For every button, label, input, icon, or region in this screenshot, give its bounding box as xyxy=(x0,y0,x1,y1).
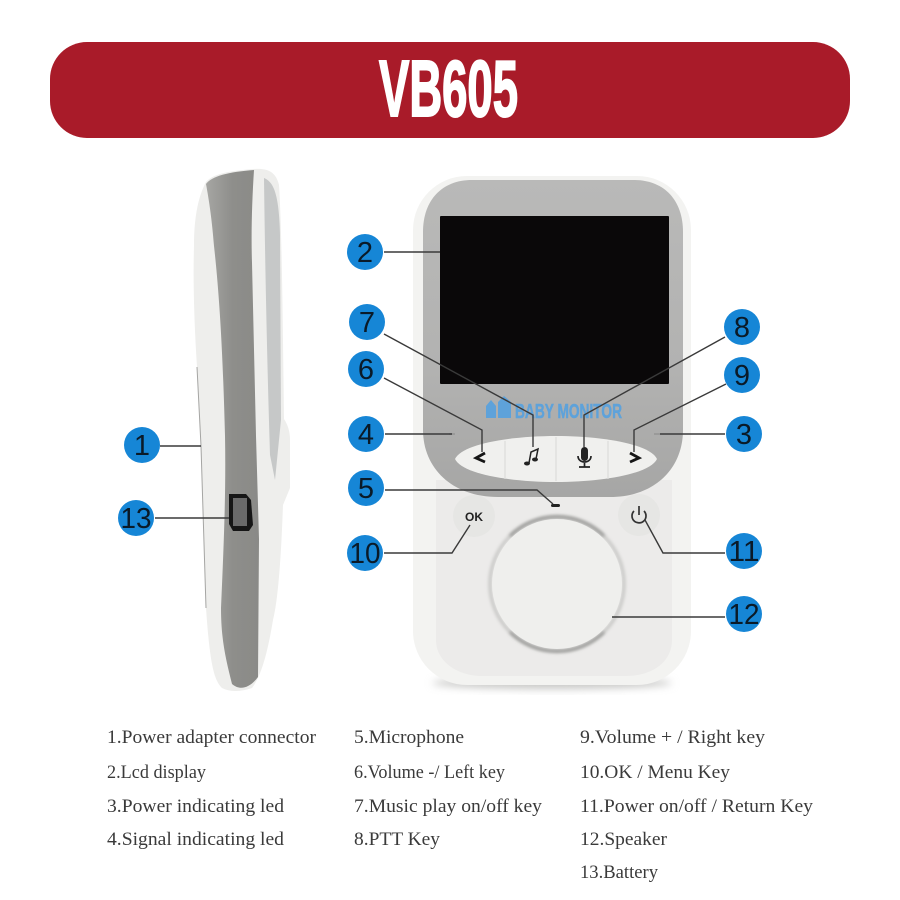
callout 6: 6 xyxy=(358,354,374,386)
screen xyxy=(440,216,669,384)
legend column 1: 4.Signal indicating led xyxy=(107,830,285,850)
callout 8: 8 xyxy=(734,312,750,344)
legend column 1 xyxy=(107,728,316,850)
callout 2: 2 xyxy=(357,237,373,269)
icon: microphone xyxy=(578,447,591,467)
callout 11: 11 xyxy=(728,536,760,568)
callout 7: 7 xyxy=(359,307,375,339)
indicator leds xyxy=(449,433,660,435)
callout 4 xyxy=(348,416,384,452)
callout 5 xyxy=(348,470,384,506)
front view of monitor xyxy=(413,176,691,689)
legend column 2: 5.Microphone xyxy=(354,728,464,748)
callout 10: 10 xyxy=(350,538,380,570)
legend column 1: 1.Power adapter connector xyxy=(107,728,316,748)
leader lines xyxy=(155,252,726,617)
device shadow xyxy=(432,677,672,689)
gray face panel xyxy=(423,180,683,497)
title banner xyxy=(50,42,850,138)
callout 8 xyxy=(724,309,760,345)
callout 12: 12 xyxy=(728,599,760,631)
legend column 3: 12.Speaker xyxy=(580,830,667,850)
legend column 2: 8.PTT Key xyxy=(354,830,441,850)
callout 7 xyxy=(349,304,385,340)
legend column 3 xyxy=(580,728,814,883)
OK button: OK xyxy=(465,510,483,524)
callout 3 xyxy=(726,416,762,452)
callout 1 xyxy=(124,427,160,463)
callout 9 xyxy=(724,357,760,393)
side screen bezel xyxy=(264,178,281,480)
callout 3: 3 xyxy=(736,419,752,451)
legend column 2: 6.Volume -/ Left key xyxy=(354,763,506,783)
icon: USB port xyxy=(229,494,253,531)
legend column 2: 7.Music play on/off key xyxy=(354,797,543,817)
callout 6 xyxy=(348,351,384,387)
icon: right arrow xyxy=(630,453,639,462)
speaker xyxy=(490,517,624,651)
side view of monitor xyxy=(194,169,290,691)
legend column 3: 9.Volume + / Right key xyxy=(580,728,766,748)
logo: BABY MONITOR xyxy=(515,401,622,423)
callout 2 xyxy=(347,234,383,270)
icon: music note xyxy=(524,449,538,466)
callout 5: 5 xyxy=(358,473,374,505)
legend column 3: 11.Power on/off / Return Key xyxy=(580,797,814,817)
power button xyxy=(618,494,660,536)
legend column 2 xyxy=(354,728,543,850)
button strip xyxy=(455,436,657,482)
legend column 3: 10.OK / Menu Key xyxy=(580,763,731,783)
legend column 1: 2.Lcd display xyxy=(107,763,207,783)
callout 4: 4 xyxy=(358,419,374,451)
logo xyxy=(486,396,622,423)
callout 1: 1 xyxy=(134,430,150,462)
callout 13: 13 xyxy=(120,503,152,535)
legend column 3: 13.Battery xyxy=(580,863,659,883)
side gray band xyxy=(206,170,259,688)
OK button xyxy=(453,495,495,537)
icon: left arrow xyxy=(476,453,485,462)
legend column 1: 3.Power indicating led xyxy=(107,797,285,817)
callout 9: 9 xyxy=(734,360,750,392)
title: VB605 xyxy=(379,44,518,133)
microphone hole xyxy=(551,504,560,507)
